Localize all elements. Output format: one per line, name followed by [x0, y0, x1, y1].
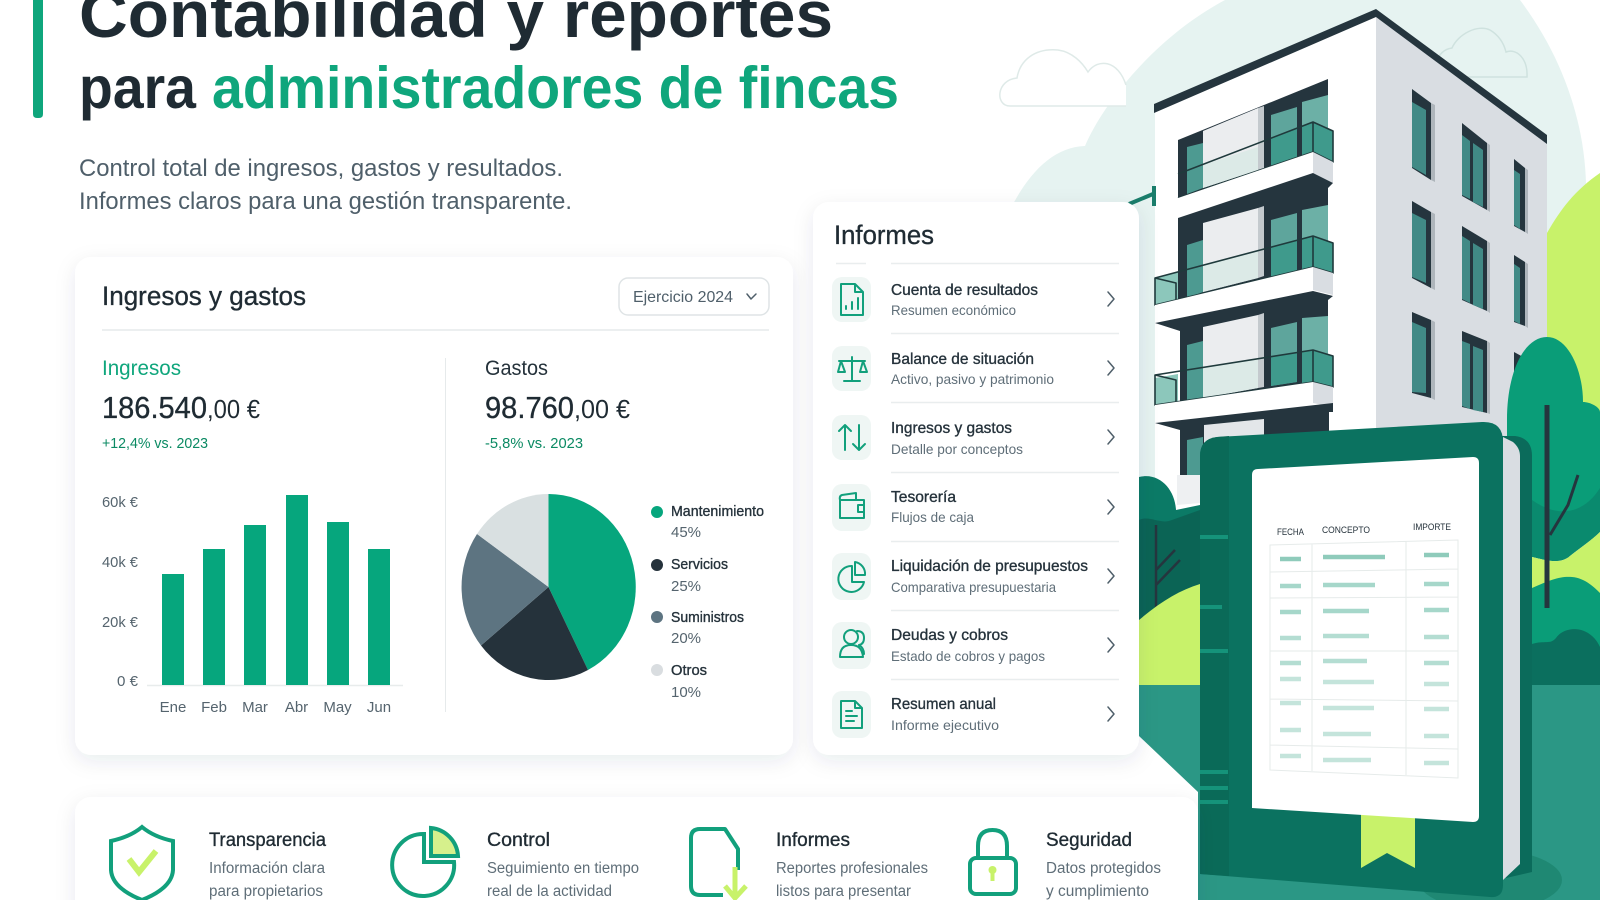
right tree foliage — [1507, 337, 1600, 511]
pie legend: 10% — [671, 684, 701, 701]
row: cuenta de resultados — [832, 277, 1114, 322]
title line 2 para: para — [79, 55, 197, 121]
row: deudas y cobros — [832, 622, 1114, 669]
table grid — [1270, 540, 1458, 778]
right bushes — [1532, 629, 1600, 690]
pie legend: Suministros — [671, 609, 744, 626]
balcony level 3 — [1155, 291, 1333, 422]
building side wall — [1376, 16, 1547, 470]
row: liquidacion de presupuestos — [832, 553, 1114, 600]
lime hill right — [1547, 173, 1600, 500]
left tree — [1139, 476, 1200, 640]
balcony level 1 — [1178, 79, 1333, 218]
x axis labels: Ene — [160, 699, 186, 716]
report table — [1270, 522, 1458, 778]
right trunk — [1544, 405, 1550, 608]
benefit: seguridad: y cumplimiento — [1046, 883, 1149, 900]
left tree lower shade — [1139, 510, 1200, 640]
icon: document download — [691, 829, 746, 898]
benefit: transparencia: Información clara — [209, 860, 325, 877]
stray rail — [1129, 186, 1154, 206]
building front wall — [1155, 16, 1376, 520]
benefit: control: Control — [487, 830, 550, 851]
panel heading: Informes — [834, 220, 934, 250]
benefit: informes: listos para presentar — [776, 883, 911, 900]
benefit: informes: Informes — [776, 830, 850, 851]
title line 2 highlight: administradores de fincas — [212, 55, 899, 121]
cloud left — [1000, 50, 1126, 106]
icon: pie — [392, 828, 458, 896]
row: tesoreria: Tesorería — [891, 489, 956, 506]
book cover — [1200, 422, 1503, 897]
icon: padlock — [970, 830, 1016, 894]
card background — [75, 257, 793, 755]
row: balance de situacion: Activo, pasivo y patrimonio — [891, 371, 1054, 387]
title — [79, 0, 899, 121]
pie legend: Mantenimiento — [671, 503, 764, 520]
table header concepto: CONCEPTO — [1322, 525, 1370, 536]
balcony level 4 — [1155, 403, 1333, 480]
expense summary — [485, 357, 631, 452]
y axis labels: 0 € — [117, 673, 139, 690]
upper floor panel — [1204, 419, 1264, 470]
right lime band — [1532, 532, 1600, 600]
book shadow — [1418, 850, 1562, 900]
pie legend: Servicios — [671, 556, 728, 573]
benefit: seguridad: Seguridad — [1046, 830, 1132, 851]
row: cuenta de resultados: Resumen económico — [891, 302, 1016, 318]
ground — [1139, 685, 1600, 900]
expense summary: -5,8% vs. 2023 — [485, 435, 583, 452]
row: ingresos y gastos: Detalle por conceptos — [891, 441, 1023, 457]
left trunk — [1156, 525, 1180, 610]
subtitle — [79, 155, 572, 215]
right branch — [1550, 475, 1578, 535]
subtitle line 1: Control total de ingresos, gastos y resultados. — [79, 155, 563, 182]
row: liquidacion de presupuestos: Liquidación de presupuestos — [891, 558, 1088, 575]
row: ingresos y gastos — [832, 415, 1114, 460]
right tree dark foliage — [1507, 470, 1600, 561]
roof edge — [1154, 9, 1547, 144]
row: deudas y cobros: Deudas y cobros — [891, 627, 1008, 644]
cloud right — [1436, 28, 1527, 77]
benefit: informes — [691, 829, 928, 900]
row: ingresos y gastos: Ingresos y gastos — [891, 420, 1012, 437]
spine marks — [1200, 537, 1228, 802]
row: liquidacion de presupuestos: Comparativa presupuestaria — [891, 579, 1056, 595]
building base — [1177, 475, 1200, 505]
benefit: transparencia — [111, 827, 326, 900]
y axis labels — [102, 494, 139, 690]
row: balance de situacion — [832, 346, 1114, 391]
benefit: transparencia: Transparencia — [209, 830, 326, 851]
card background — [813, 202, 1139, 755]
y axis labels: 20k € — [102, 614, 139, 631]
row: resumen anual — [832, 691, 1114, 738]
table row bars — [1280, 555, 1449, 763]
x axis labels — [160, 699, 391, 716]
book back cover — [1500, 436, 1532, 878]
row: tesoreria: Flujos de caja — [891, 509, 974, 525]
strip background — [75, 797, 1198, 900]
x axis labels: Abr — [285, 699, 308, 716]
pie legend: Otros — [671, 662, 707, 679]
year selector — [619, 278, 769, 315]
x axis labels: May — [323, 699, 352, 716]
income summary: 186.540 — [102, 390, 207, 425]
panel: ingresos y gastos — [75, 257, 793, 755]
x axis labels: Feb — [201, 699, 227, 716]
panel: informes — [813, 202, 1139, 755]
illustration: building scene — [1000, 0, 1600, 900]
row: cuenta de resultados: Cuenta de resultados — [891, 282, 1038, 299]
table header fecha: FECHA — [1277, 527, 1305, 538]
book pages — [1503, 437, 1520, 880]
subtitle line 2: Informes claros para una gestión transparente. — [79, 188, 572, 215]
row: tesoreria — [832, 484, 1114, 531]
pie legend — [651, 503, 764, 701]
bookmark — [1361, 810, 1415, 868]
side windows — [1412, 89, 1528, 414]
x axis labels: Jun — [367, 699, 391, 716]
expense summary: Gastos — [485, 357, 548, 380]
benefit: seguridad — [970, 830, 1161, 900]
income summary: Ingresos — [102, 357, 181, 380]
card heading: Ingresos y gastos — [102, 281, 306, 311]
table header importe: IMPORTE — [1413, 522, 1451, 533]
income summary: +12,4% vs. 2023 — [102, 435, 208, 452]
benefit: control: Seguimiento en tiempo — [487, 860, 639, 877]
benefit: control — [392, 828, 639, 900]
book spine — [1200, 436, 1229, 876]
pie legend: 45% — [671, 524, 701, 541]
row: resumen anual: Resumen anual — [891, 696, 996, 713]
expense summary: 98.760 — [485, 390, 574, 425]
report sheet — [1252, 457, 1479, 822]
expense summary: ,00 € — [574, 394, 631, 424]
y axis labels: 60k € — [102, 494, 139, 511]
balcony level 2 — [1155, 173, 1333, 322]
benefit: seguridad: Datos protegidos — [1046, 860, 1161, 877]
bars — [162, 495, 390, 685]
year selector: Ejercicio 2024 — [633, 289, 733, 306]
right green mound — [1532, 577, 1600, 690]
row: balance de situacion: Balance de situación — [891, 351, 1034, 368]
income summary — [102, 357, 260, 452]
panel: benefits — [75, 797, 1198, 900]
accent bar — [33, 0, 43, 118]
icon: shield — [111, 827, 173, 900]
income summary: ,00 € — [207, 394, 260, 424]
y axis labels: 40k € — [102, 554, 139, 571]
pie legend: 20% — [671, 630, 701, 647]
pie chart — [462, 494, 636, 680]
left lime hill — [1139, 584, 1200, 690]
row: deudas y cobros: Estado de cobros y pagos — [891, 648, 1045, 664]
benefit: control: real de la actividad — [487, 883, 612, 900]
sky blob — [1010, 0, 1586, 480]
x axis labels: Mar — [242, 699, 268, 716]
benefit: transparencia: para propietarios — [209, 883, 323, 900]
benefit: informes: Reportes profesionales — [776, 860, 928, 877]
row: resumen anual: Informe ejecutivo — [891, 717, 999, 733]
pie legend: 25% — [671, 578, 701, 595]
bar chart — [102, 494, 403, 716]
upper floor teal pane — [1187, 437, 1203, 475]
